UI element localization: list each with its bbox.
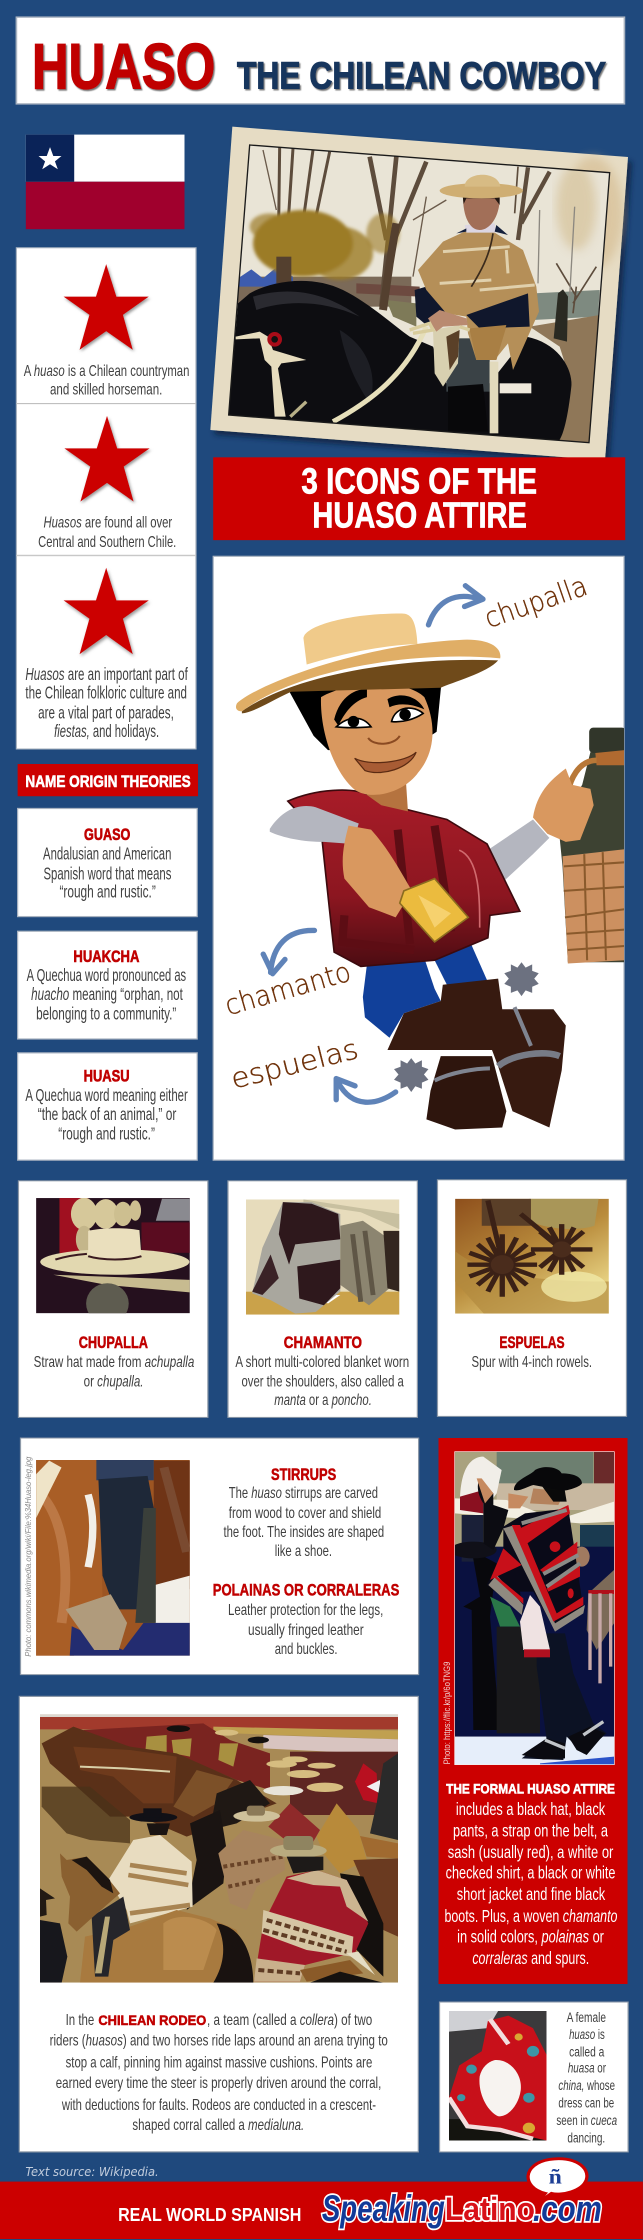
text: huasa description: china, whose: [558, 2079, 615, 2094]
text: polainas: Leather protection for the legs,: [228, 1601, 383, 1619]
caption: [235, 1333, 409, 1409]
star 2: [64, 416, 150, 502]
text: formal attire: [444, 1782, 617, 1968]
logo: speaking latino: ñ: [549, 2165, 562, 2188]
horse head: [60, 1853, 120, 1932]
label: espuelas: espuelas: [227, 1032, 362, 1096]
card: huakcha: huacho meaning “orphan, not: [31, 984, 183, 1004]
text: polainas: usually fringed leather: [248, 1621, 364, 1639]
star 1: [64, 264, 149, 350]
neck and face: [366, 784, 408, 812]
poncho: [288, 790, 520, 966]
upper hats: [215, 1730, 343, 1795]
text: where found: Central and Southern Chile.: [38, 533, 176, 551]
logo: speaking latino: Latino: [445, 2191, 535, 2227]
text: huasa description: seen in cueca: [556, 2114, 617, 2129]
logo: speaking latino: [322, 2159, 602, 2229]
text: polainas: [213, 1580, 399, 1658]
text: huasa description: A female: [567, 2011, 606, 2026]
text: folklore: are a vital part of parades,: [38, 702, 174, 722]
white poncho: [108, 1835, 193, 1923]
text: huasa description: called a: [569, 2045, 605, 2060]
ground shadows: [42, 1787, 130, 1843]
rider: [446, 338, 490, 392]
caption: CHAMANTO: [284, 1333, 362, 1352]
card: huakcha: belonging to a community.”: [36, 1003, 176, 1023]
text: huasa description: huasa or: [568, 2062, 606, 2076]
front hat: [270, 1844, 327, 1858]
card: chupalla: [18, 1181, 208, 1417]
card: guaso: GUASO: [84, 826, 131, 844]
card: chamanto: [228, 1181, 417, 1417]
heading: name origin theories: NAME ORIGIN THEORIES: [25, 772, 191, 791]
tagline: REAL WORLD SPANISH: [118, 2205, 301, 2226]
card: female huasa: [440, 2002, 628, 2152]
photo: formal huaso: [442, 1451, 615, 1765]
text: rodeo description: In the: [66, 2011, 94, 2029]
legs: [435, 946, 487, 984]
text: rodeo description: riders (huasos) and two horses ride laps around an arena trying to: [50, 2032, 388, 2049]
photo credit: Photo: commons.wikimedia.org/wiki/File:%34Huaso-leg.jpg: [23, 1456, 33, 1657]
text: folklore: Huasos are an important part of: [25, 664, 188, 684]
logo: speaking latino: Speaking: [322, 2188, 445, 2229]
horse: [226, 281, 571, 443]
text: stirrups: [223, 1465, 384, 1560]
caption: ESPUELAS: [499, 1333, 565, 1352]
card: huakcha: A Quechua word pronounced as: [27, 965, 186, 985]
text: definition: [24, 362, 189, 398]
card: huakcha: [18, 931, 197, 1039]
text: stirrups: from wood to cover and shield: [229, 1504, 381, 1522]
caption: A short multi-colored blanket worn: [235, 1353, 409, 1371]
label: chupalla: chupalla: [480, 569, 591, 635]
arrow: espuelas: [336, 1079, 396, 1102]
text: definition: and skilled horseman.: [50, 381, 162, 398]
text: folklore: the Chilean folkloric culture and: [25, 682, 187, 702]
right horses: [360, 1836, 398, 1858]
card: guaso: “rough and rustic.”: [59, 881, 156, 901]
star 3: [64, 568, 149, 654]
photo: rodeo: [40, 1714, 398, 1983]
spurs: [504, 962, 539, 996]
man at left: [40, 1920, 67, 1983]
panel: formal huaso attire: [438, 1438, 628, 1984]
distant scenery: [238, 277, 411, 307]
text: rodeo description: with deductions for faults. Rodeos are conducted in a crescent-: [61, 2096, 376, 2114]
card: huasu: “rough and rustic.”: [58, 1123, 155, 1143]
card: guaso: Andalusian and American: [43, 844, 171, 863]
ponchos: [317, 1803, 367, 1873]
text: polainas: POLAINAS OR CORRALERAS: [213, 1580, 399, 1599]
caption: or chupalla.: [84, 1372, 143, 1390]
photo: spurs: [455, 1199, 609, 1314]
caption: manta or a poncho.: [274, 1391, 372, 1409]
photo credit: Photo: https://flic.kr/p/6oTNG9: [442, 1662, 452, 1764]
card: huakcha: HUAKCHA: [73, 948, 140, 966]
riders back row: [83, 1723, 270, 1790]
title banner: [16, 17, 624, 104]
photo: ponchos: [246, 1199, 399, 1315]
heading: 3 icons of the huaso attire: HUASO ATTIRE: [312, 496, 527, 536]
text: rodeo description: , a team (called a collera) of two: [207, 2011, 372, 2029]
card: guaso: Spanish word that means: [43, 863, 172, 883]
panel: cartoon huaso: [213, 556, 626, 1160]
text: polainas: and buckles.: [275, 1640, 337, 1658]
text source note: Text source: Wikipedia.: [25, 2166, 159, 2180]
text: folklore: fiestas, and holidays.: [54, 721, 159, 741]
card: stirrups and polainas: [20, 1438, 419, 1675]
caption: CHUPALLA: [79, 1333, 148, 1352]
card: huasu: A Quechua word meaning either: [25, 1085, 188, 1105]
right arm: [490, 820, 550, 880]
line of horses: [42, 1727, 277, 1837]
text: rodeo description: [50, 2011, 388, 2134]
text: rodeo description: earned every time the steer is properly driven around the corral,: [56, 2074, 381, 2092]
heading: 3 icons of the huaso attire: [213, 457, 625, 540]
arrow: chamanto: [263, 930, 314, 974]
panel: what is a huaso: [16, 248, 196, 749]
heading: 3 icons of the huaso attire: 3 ICONS OF THE: [301, 462, 537, 502]
photo: cueca dress: [449, 2011, 547, 2141]
text: where found: Huasos are found all over: [43, 514, 173, 531]
text: folklore: [25, 664, 188, 741]
boots: [387, 979, 566, 1128]
text: stirrups: The huaso stirrups are carved: [229, 1483, 378, 1501]
foreground red poncho: [254, 1870, 368, 1982]
caption: over the shoulders, also called a: [241, 1372, 404, 1390]
post: [554, 289, 568, 342]
label: chamanto: chamanto: [221, 955, 354, 1022]
hand and pouch: [343, 826, 412, 917]
footer: [0, 2159, 643, 2240]
photo: straw hats: [36, 1198, 190, 1324]
illustration: huaso character: [236, 613, 626, 1130]
text: formal attire: in solid colors, polainas or: [457, 1927, 604, 1946]
hat: [303, 613, 417, 664]
card: huasu: [18, 1053, 197, 1160]
right hand: [533, 768, 594, 842]
huaso figure: [522, 1633, 607, 1760]
photo: leg in stirrup: [36, 1460, 190, 1656]
text: where found: [38, 514, 176, 551]
photo: huaso on horse postcard: [210, 127, 628, 460]
text: huasa description: huaso is: [569, 2028, 605, 2043]
text: huasa description: [556, 2011, 617, 2146]
text: stirrups: the foot. The insides are shaped: [223, 1523, 384, 1541]
red flag: [355, 1763, 378, 1803]
arrow: chupalla: [428, 586, 483, 625]
card: guaso: [18, 808, 197, 917]
card: espuelas: [437, 1180, 626, 1416]
caption: Straw hat made from achupalla: [34, 1353, 194, 1371]
title: huaso: HUASO: [32, 32, 215, 102]
card: chilean rodeo: [19, 1696, 418, 2152]
heading: name origin theories: [18, 764, 198, 796]
text: formal attire: corraleras and spurs.: [472, 1948, 589, 1968]
text: rodeo description: CHILEAN RODEO: [98, 2013, 206, 2029]
text: rodeo description: stop a calf, pinning him against massive cushions. Points are: [66, 2053, 372, 2071]
yellow bush: [250, 210, 400, 280]
text: rodeo description: shaped corral called a medialuna.: [132, 2116, 304, 2134]
tan horse rump: [80, 1910, 253, 1983]
text: definition: A huaso is a Chilean countryman: [24, 362, 189, 380]
card: huasu: HUASU: [84, 1067, 130, 1085]
caption: [471, 1333, 592, 1371]
logo: speaking latino: .com: [533, 2189, 602, 2229]
caption: [34, 1333, 194, 1390]
left arm: [270, 806, 359, 844]
text: stirrups: STIRRUPS: [271, 1465, 336, 1484]
bottle: [558, 752, 624, 962]
card: huasu: “the back of an animal,” or: [38, 1104, 176, 1124]
trees: [278, 147, 596, 313]
bridle and rope: [236, 332, 306, 417]
text: stirrups: like a shoe.: [275, 1542, 332, 1560]
text: huasa description: dancing.: [567, 2131, 605, 2146]
icon: chilean flag: [26, 135, 184, 229]
